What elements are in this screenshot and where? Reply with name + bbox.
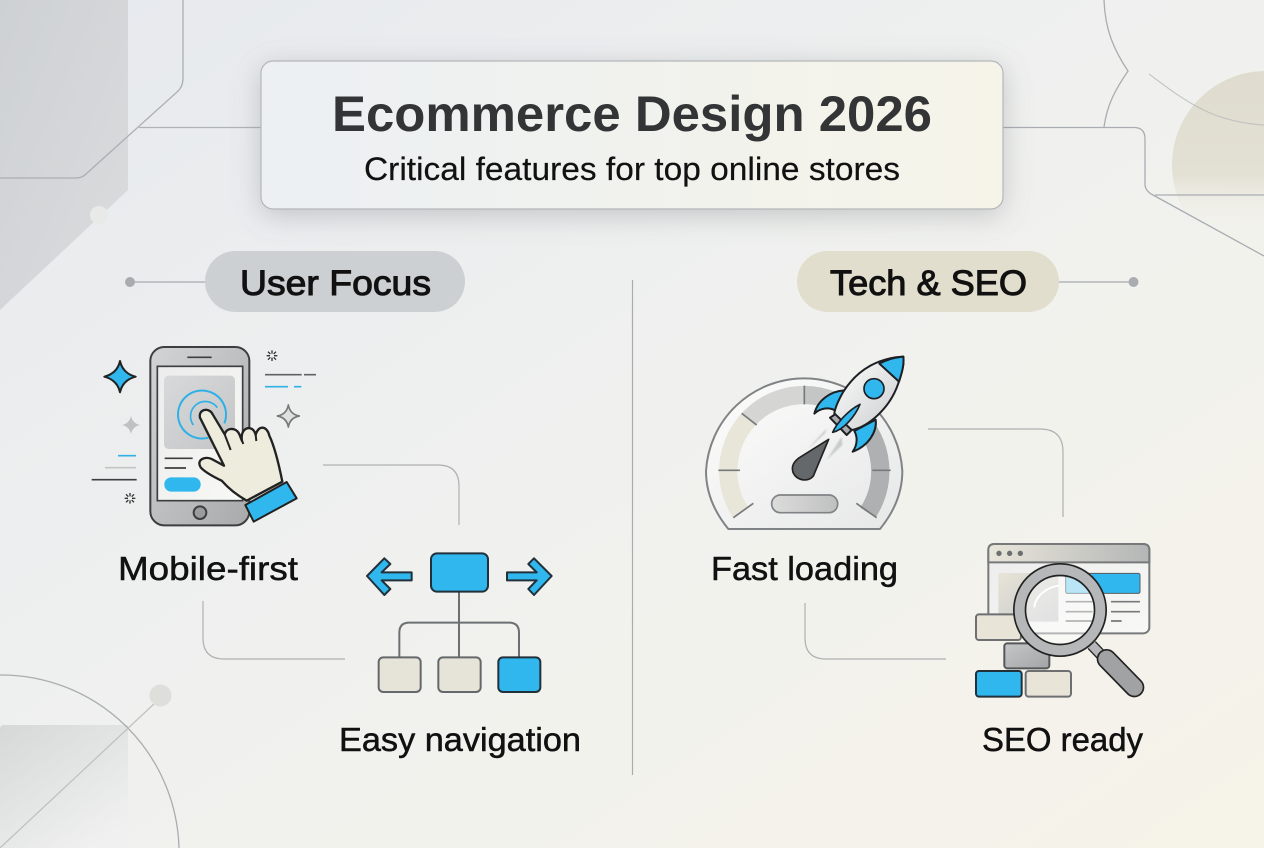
decorative corner: bottom left: [0, 675, 179, 848]
decorative corner: top right: [1003, 0, 1264, 259]
sparkle: blue: [104, 361, 136, 392]
decorative corner: top left: [0, 0, 262, 310]
child node 1: [379, 657, 421, 692]
content block: blue: [976, 671, 1022, 697]
hand: [199, 410, 282, 501]
connector: SEO to fast loading: [805, 603, 946, 659]
connector: mobile-first to navigation: [323, 465, 459, 525]
icon: browser with magnifier: [976, 544, 1149, 697]
browser window: [988, 544, 1149, 633]
label: Fast loading: Fast loading: [711, 550, 898, 587]
section heading: User Focus: User Focus: [240, 264, 431, 303]
magnifier: [1020, 570, 1134, 687]
content block: beige 2: [1026, 671, 1071, 697]
needle: [792, 439, 829, 480]
label: Mobile-first: Mobile-first: [118, 550, 298, 587]
gauge pill: [772, 495, 838, 513]
connector: fast loading to SEO: [928, 429, 1063, 517]
motion lines: [265, 372, 316, 377]
sparkle: solid gray: [122, 416, 140, 434]
label: Easy navigation: Easy navigation: [339, 721, 581, 758]
icon: speedometer with rocket: [706, 357, 904, 529]
left arrow: [367, 558, 412, 595]
center divider: [632, 280, 634, 775]
right arrow: [507, 558, 552, 595]
title: Ecommerce Design 2026: [332, 86, 932, 142]
icon: navigation tree: [367, 553, 552, 692]
child node 2: [438, 657, 481, 692]
section heading: User Focus: [125, 251, 465, 312]
title card: [261, 61, 1003, 209]
gauge band: [728, 395, 880, 513]
child node 3: [498, 657, 540, 692]
rocket: [814, 357, 904, 452]
cuff: [245, 482, 297, 522]
subtitle: Critical features for top online stores: [364, 151, 900, 187]
gauge ticks: [718, 386, 891, 518]
phone body: [150, 347, 249, 525]
top node: [431, 553, 488, 592]
section heading: Tech & SEO: [797, 251, 1138, 312]
gauge body: [706, 378, 902, 529]
content block: beige: [976, 614, 1021, 640]
speed streaks: [807, 428, 842, 460]
sparkle: outlined gray: [277, 405, 299, 427]
content block: gray: [1004, 643, 1049, 668]
connector: navigation to mobile-first: [203, 601, 345, 659]
label: SEO ready: SEO ready: [982, 721, 1143, 758]
icon: phone with tapping hand: [92, 347, 316, 525]
knuckle lines: [225, 434, 256, 450]
asterisks: [125, 350, 277, 504]
section heading: Tech & SEO: Tech & SEO: [830, 264, 1027, 303]
tree connectors: [399, 592, 519, 657]
